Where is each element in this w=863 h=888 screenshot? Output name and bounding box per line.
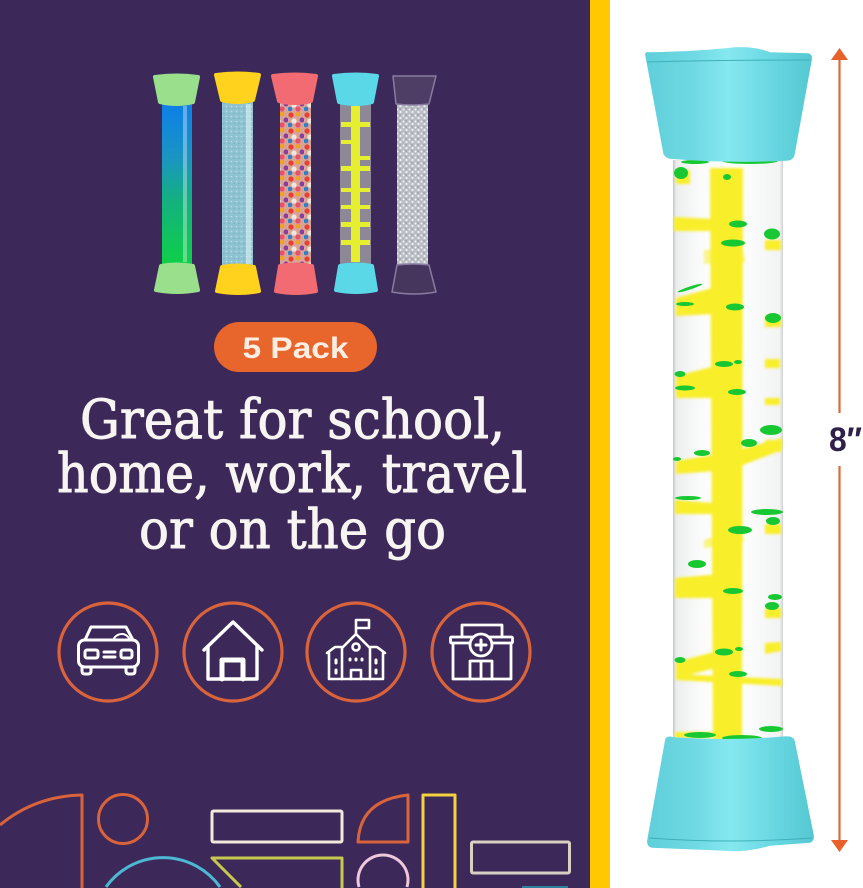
cyan liquid timer tube: [334, 74, 377, 292]
heading: Great for school,: [80, 388, 505, 451]
badge: 5 Pack: 5 Pack: [242, 332, 349, 365]
purple silver glitter tube: [392, 76, 436, 294]
icon: school: [307, 603, 405, 701]
badge: 5 Pack: [214, 322, 377, 372]
heading: [57, 388, 527, 561]
product photo: five sensory tubes: [155, 74, 436, 294]
purple background panel: [0, 0, 590, 888]
heading: home, work, travel: [57, 442, 527, 505]
yellow glitter tube: [216, 74, 259, 293]
yellow divider stripe: [590, 0, 610, 888]
red bead tube: [273, 74, 316, 293]
icon: hospital: [432, 603, 530, 701]
icon: car: [59, 603, 157, 701]
top cap: [646, 48, 811, 161]
heading: or on the go: [139, 498, 446, 561]
icon: house: [184, 603, 282, 701]
decorative outline shapes: [0, 794, 570, 888]
yellow liquid streams: [674, 168, 782, 740]
glass tube: [673, 160, 783, 740]
bottom cap: [648, 737, 813, 850]
green droplets: [673, 158, 783, 741]
white product panel: [610, 0, 863, 888]
green-blue tube: [155, 76, 198, 292]
height arrow: 8 inches: [829, 48, 862, 852]
product photo: large liquid timer: [646, 48, 813, 850]
